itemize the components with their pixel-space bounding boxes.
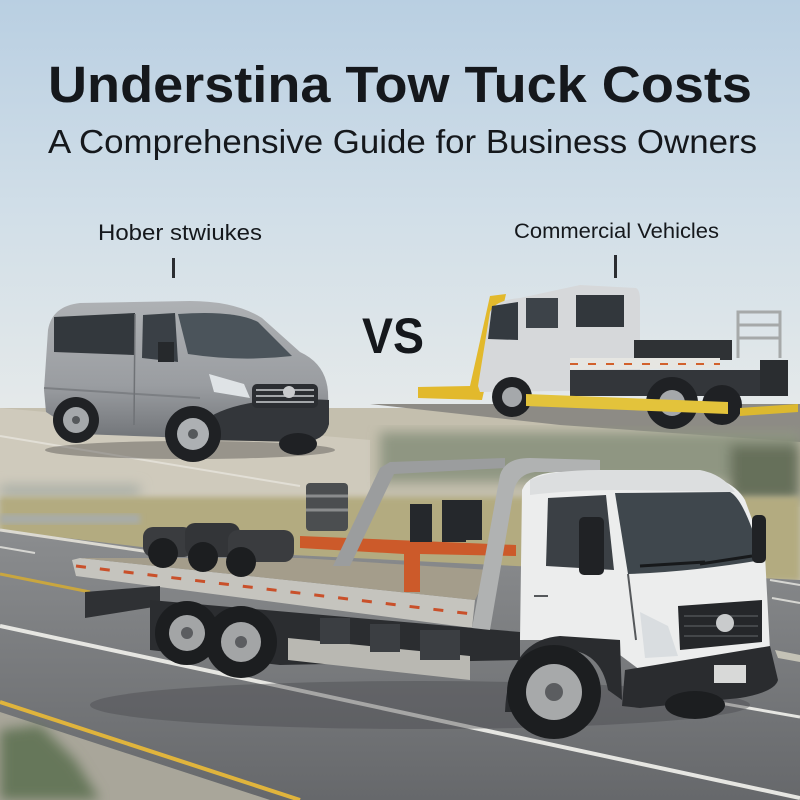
front wheels: [507, 645, 601, 739]
cab support frame: [472, 458, 600, 630]
boom arm: [333, 458, 505, 566]
subtitle: A Comprehensive Guide for Business Owners: [48, 123, 757, 160]
grille: [678, 600, 762, 650]
windshield: [615, 492, 762, 574]
cab body: [520, 472, 770, 670]
illustration: grey passenger van: [44, 301, 335, 462]
background landscape: [0, 404, 800, 583]
orange lift frame: [300, 536, 516, 592]
rear wheels: [155, 601, 219, 665]
cab roof: [530, 470, 735, 495]
deck upper surface: [80, 558, 490, 600]
versus label: VS: [362, 308, 424, 364]
headlight: [640, 612, 678, 658]
label: left vehicle: Hober stwiukes: [98, 220, 262, 245]
front wheel arch: [505, 636, 622, 712]
illustration: yellow flatbed tow truck: [418, 285, 798, 429]
side window: [546, 495, 614, 570]
illustration: foreground white flatbed tow truck: [72, 458, 778, 739]
mirror: [579, 517, 604, 575]
flatbed deck: [72, 558, 475, 628]
equipment on bed: [143, 483, 348, 577]
bumper: [622, 646, 778, 708]
title: Understina Tow Tuck Costs: [48, 56, 752, 113]
label: right vehicle: Commercial Vehicles: [514, 220, 719, 243]
door seam and handle: [534, 574, 636, 640]
label line: left vehicle: [172, 258, 175, 278]
sky background: [0, 0, 800, 440]
label line: right vehicle: [614, 255, 617, 278]
road: [0, 530, 800, 800]
chassis: [150, 600, 520, 665]
